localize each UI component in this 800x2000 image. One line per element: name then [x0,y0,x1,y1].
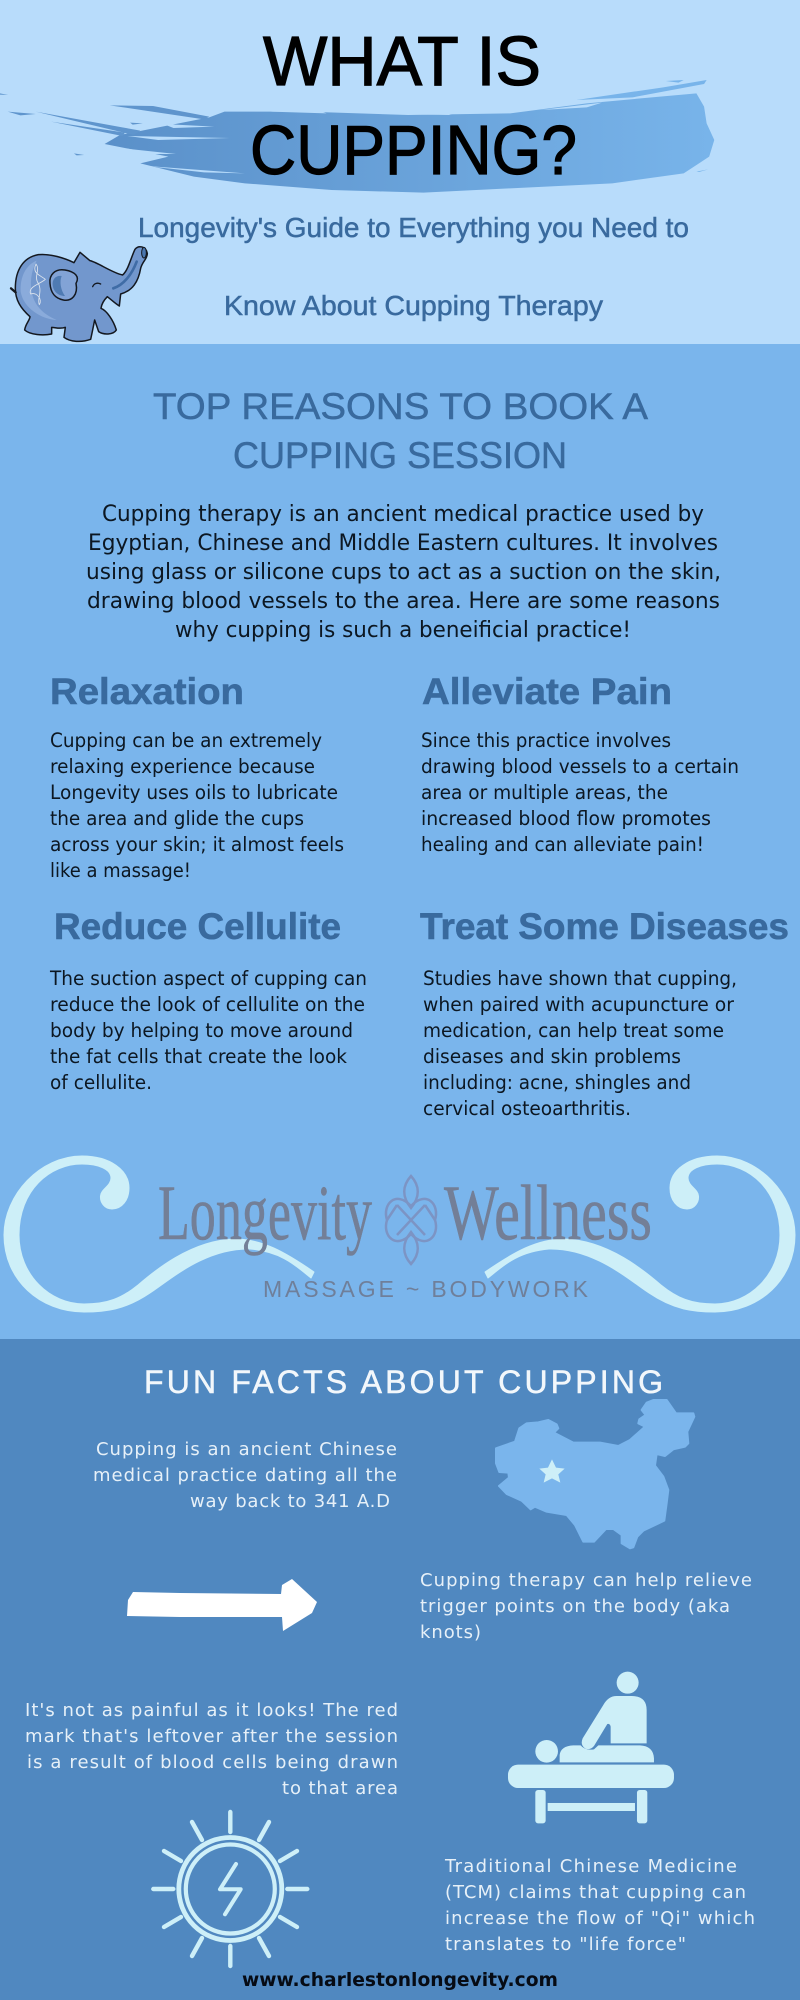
icon: china map [496,1400,694,1548]
fact: not painful: It's not as painful as it looks! The red [25,1700,398,1721]
text: treat some diseases [423,967,737,1120]
fact: not painful [25,1700,398,1799]
swirl: left [4,1156,314,1312]
swirl: right [485,1156,795,1312]
reason: relaxation [50,671,344,882]
text: alleviate pain: Since this practice involves [421,729,671,752]
icon: star [539,1459,565,1483]
text: relaxation: relaxing experience because [50,755,315,778]
fact: trigger points: trigger points on the body (aka [420,1596,730,1617]
fact: qi: increase the flow of "Qi" which [445,1908,755,1929]
intro paragraph: why cupping is such a beneificial practice! [175,618,631,643]
text: reduce cellulite [49,967,367,1094]
heading: top reasons: CUPPING SESSION [233,434,567,476]
title [250,22,577,189]
logo: longevity wellness [4,1156,795,1312]
fact: ancient practice: medical practice dating all the [93,1465,397,1486]
reason: alleviate pain [421,671,739,856]
title: WHAT IS [263,22,541,100]
text: treat some diseases: medication, can help treat some [423,1019,724,1042]
text: alleviate pain: healing and can alleviate pain! [421,833,704,856]
icon: elephant [11,247,147,341]
logo wordmark [158,1169,652,1256]
logo wordmark: Wellness [444,1169,652,1256]
title: CUPPING? [250,111,577,189]
fact: qi: translates to "life force" [445,1934,686,1955]
text: relaxation: the area and glide the cups [50,807,304,830]
heading: treat some diseases: Treat Some Diseases [420,906,789,947]
logo wordmark: Longevity [158,1169,372,1256]
text: relaxation: across your skin; it almost feels [50,833,344,856]
heading: fun facts: FUN FACTS ABOUT CUPPING [144,1364,663,1400]
icon: massage [508,1672,674,1823]
intro paragraph: Cupping therapy is an ancient medical practice used by [102,502,704,527]
fact: ancient practice [93,1439,397,1512]
text: reduce cellulite: The suction aspect of cupping can [49,967,367,990]
text: reduce cellulite: the fat cells that create the look [50,1045,348,1068]
fact: qi: (TCM) claims that cupping can [445,1882,746,1903]
text: alleviate pain: increased blood flow promotes [421,807,711,830]
fact: qi [444,1856,755,1955]
logo tagline: MASSAGE ~ BODYWORK [263,1276,589,1302]
reason: reduce cellulite [49,906,367,1094]
text: treat some diseases: Studies have shown that cupping, [423,967,737,990]
panel: top reasons [0,344,800,1339]
fact: not painful: is a result of blood cells being drawn [27,1752,398,1773]
panel: fun facts [0,1339,800,2000]
text: treat some diseases: cervical osteoarthritis. [423,1097,631,1120]
text: reduce cellulite: of cellulite. [50,1071,152,1094]
fact: not painful: to that area [282,1778,398,1799]
arrow [127,1579,317,1631]
panel: header [0,0,800,344]
intro paragraph: drawing blood vessels to the area. Here are some reasons [87,589,720,614]
fact: ancient practice: way back to 341 A.D [190,1491,390,1512]
text: relaxation: Longevity uses oils to lubricate [50,781,338,804]
reason: treat some diseases [420,906,789,1120]
heading: relaxation: Relaxation [50,671,244,712]
text: treat some diseases: when paired with acupuncture or [423,993,735,1016]
heading: alleviate pain: Alleviate Pain [422,671,672,712]
intro paragraph: Egyptian, Chinese and Middle Eastern cultures. It involves [88,531,718,556]
text: relaxation: like a massage! [50,859,191,882]
fact: trigger points: Cupping therapy can help relieve [420,1570,752,1591]
heading: top reasons: TOP REASONS TO BOOK A [153,385,648,427]
intro paragraph: using glass or silicone cups to act as a suction on the skin, [86,560,721,585]
intro paragraph [86,502,721,643]
fact: trigger points: knots) [420,1622,481,1643]
subtitle: Know About Cupping Therapy [224,290,603,321]
subtitle [138,212,689,321]
brush stroke behind title [0,80,714,193]
heading: reduce cellulite: Reduce Cellulite [54,906,341,947]
text: reduce cellulite: body by helping to move around [50,1019,353,1042]
text: treat some diseases: including: acne, shingles and [423,1071,691,1094]
text: alleviate pain [421,729,739,856]
text: relaxation [50,729,344,882]
fact: not painful: mark that's leftover after the session [25,1726,398,1747]
fact: trigger points [420,1570,752,1643]
text: reduce cellulite: reduce the look of cellulite on the [50,993,365,1016]
logo knot [386,1176,436,1264]
website url: www.charlestonlongevity.com [242,1969,558,1991]
text: treat some diseases: diseases and skin problems [423,1045,681,1068]
icon: energy sun [153,1812,307,1966]
fact: ancient practice: Cupping is an ancient Chinese [96,1439,397,1460]
subtitle: Longevity's Guide to Everything you Need to [138,212,689,243]
text: alleviate pain: area or multiple areas, the [421,781,668,804]
heading: top reasons [153,385,648,476]
text: relaxation: Cupping can be an extremely [50,729,322,752]
text: alleviate pain: drawing blood vessels to a certain [421,755,739,778]
fact: qi: Traditional Chinese Medicine [444,1856,737,1877]
